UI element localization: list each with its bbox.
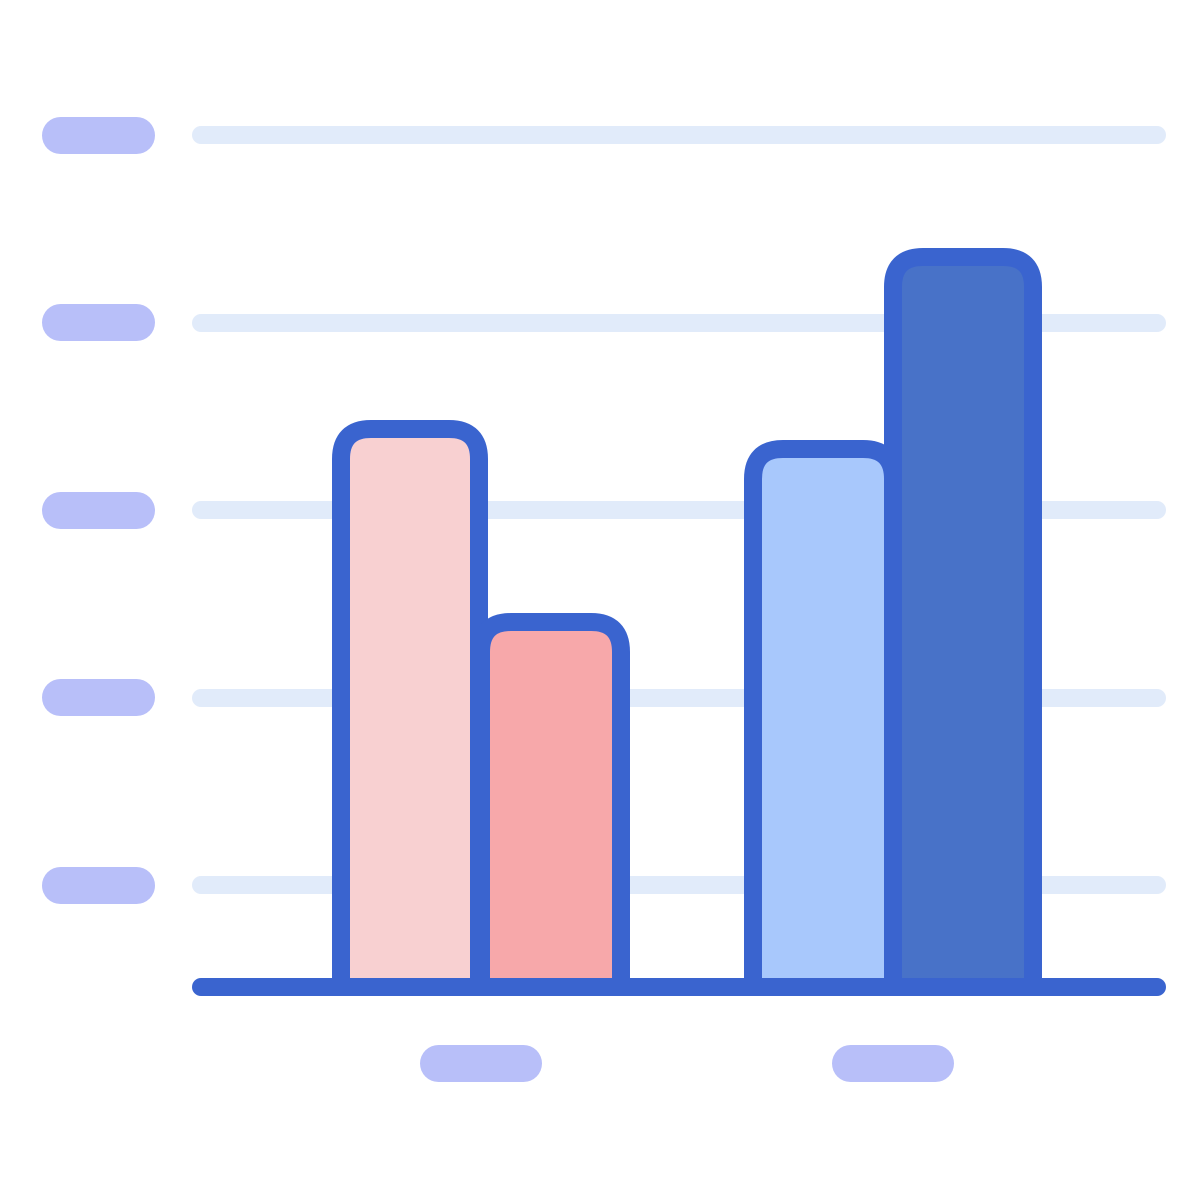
baseline: [201, 978, 1157, 996]
bar 2: [481, 622, 621, 987]
x axis labels: [420, 1045, 954, 1082]
bar 4: [893, 257, 1033, 987]
bar 1: [341, 429, 479, 987]
y axis labels: [42, 117, 155, 904]
bar 3: [753, 449, 893, 987]
